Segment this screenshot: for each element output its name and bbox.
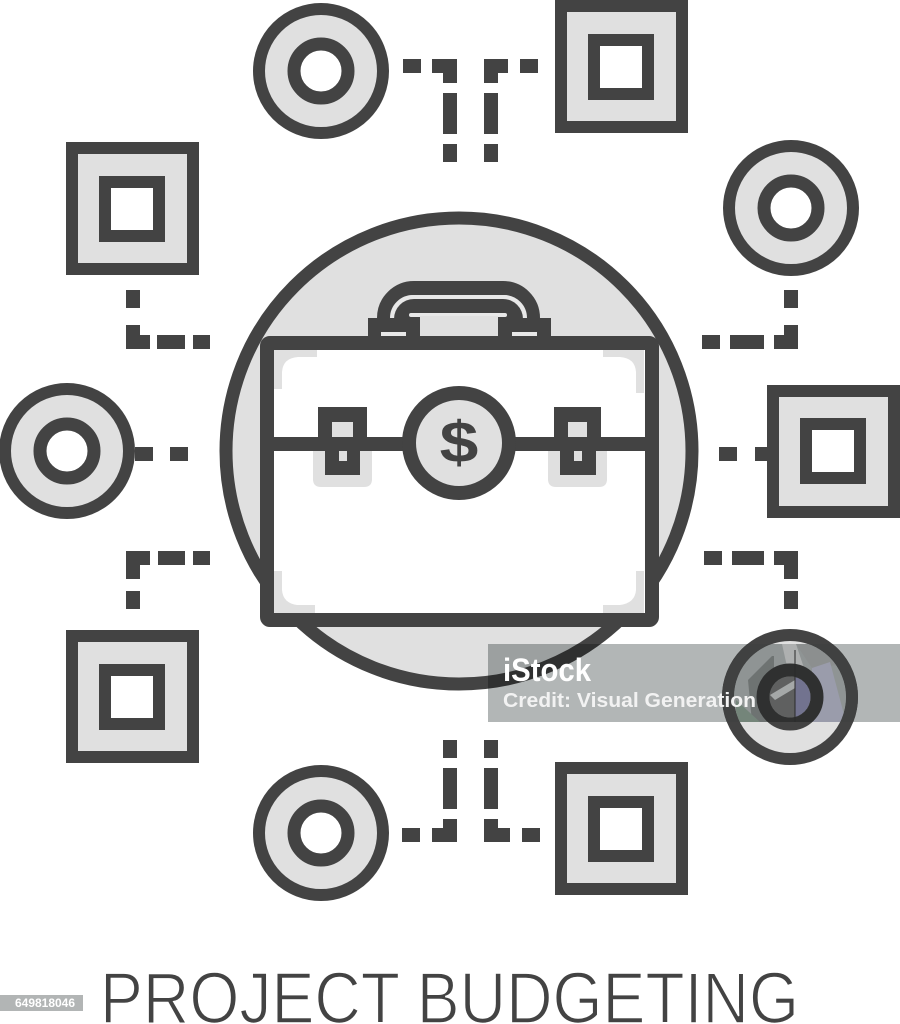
case seam xyxy=(273,437,645,451)
dashed connector: lower left xyxy=(126,551,210,609)
dashed connector: top right xyxy=(484,59,538,162)
dollar coin: $ xyxy=(440,409,478,475)
left clasp xyxy=(318,407,367,475)
satellite: square top right xyxy=(561,6,682,127)
watermark logo: iStock xyxy=(503,652,591,688)
watermark band xyxy=(488,644,900,722)
dashed connector: left xyxy=(135,447,188,461)
dashed connector: upper right xyxy=(702,290,798,349)
satellite: square right xyxy=(773,391,894,512)
buckle shadows xyxy=(313,451,607,487)
watermark tint over lower right circle xyxy=(722,644,858,722)
image id tag xyxy=(0,995,83,1011)
satellite: square bottom xyxy=(561,768,682,889)
dashed connector: upper left xyxy=(126,290,210,349)
satellite: circle top xyxy=(259,9,383,133)
image id tag: 649818046 xyxy=(15,996,75,1010)
satellite: circle left xyxy=(5,389,129,513)
briefcase handle xyxy=(368,288,551,338)
central circle backdrop xyxy=(226,218,692,684)
satellite: square upper left xyxy=(72,148,193,269)
watermark credit: Credit: Visual Generation xyxy=(503,690,756,712)
dashed connector: lower right xyxy=(704,551,798,609)
briefcase body xyxy=(267,343,652,620)
satellite: circle upper right xyxy=(729,146,853,270)
satellite: square lower left xyxy=(72,636,193,757)
satellite: circle lower right xyxy=(728,635,852,759)
right clasp xyxy=(554,407,601,475)
case corner shadows xyxy=(274,350,644,613)
dashed connector: right xyxy=(719,447,769,461)
icon: briefcase xyxy=(267,288,652,620)
dashed connector: bottom right xyxy=(484,740,540,842)
dashed connector: top left xyxy=(403,59,457,162)
dollar coin xyxy=(409,393,509,493)
satellite: circle bottom xyxy=(259,771,383,895)
dashed connector: bottom left xyxy=(402,740,457,842)
